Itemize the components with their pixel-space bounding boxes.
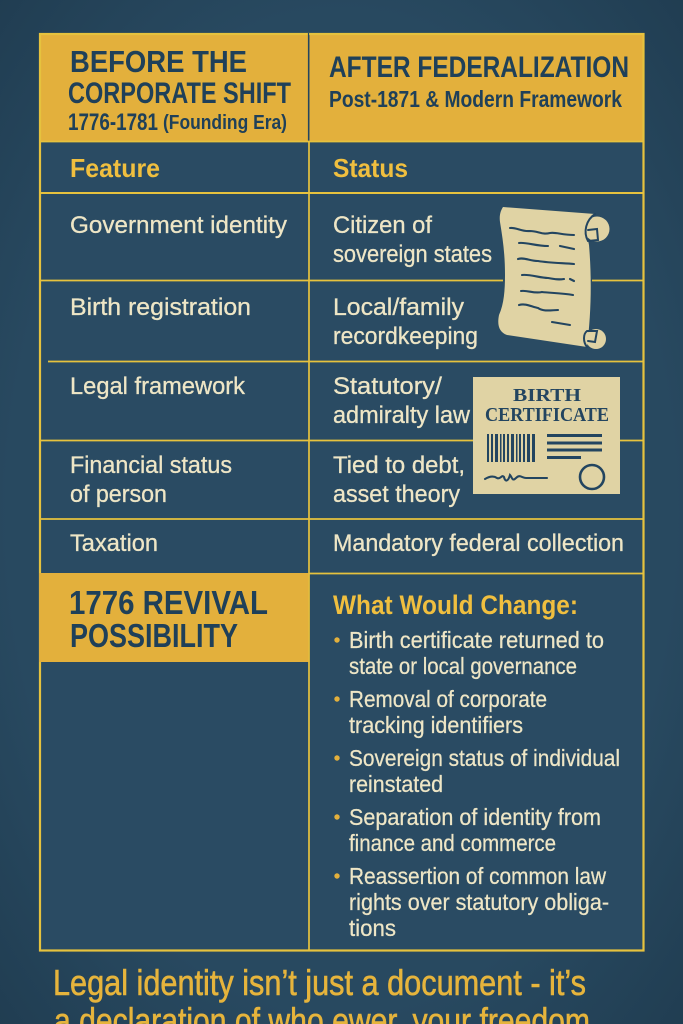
- bullet 4: finance and commerce: [349, 830, 556, 856]
- header panel: before: 1776-1781: [68, 109, 158, 136]
- row: birth registration: [70, 294, 478, 350]
- icon: parchment scroll: [498, 207, 610, 349]
- certificate text lines: [547, 434, 602, 459]
- header panel: before: (Founding Era): [163, 112, 287, 134]
- bullet 1: [334, 627, 604, 679]
- header panel: before: CORPORATE SHIFT: [68, 77, 291, 110]
- row: financial status: Tied to debt,: [333, 452, 465, 479]
- panel: 1776 revival possibility: 1776 REVIVAL: [69, 584, 268, 621]
- row: legal framework: Legal framework: [70, 373, 246, 400]
- row: financial status: asset theory: [333, 481, 461, 508]
- icon: birth certificate: CERTIFICATE: [485, 404, 609, 426]
- bullet 3: Sovereign status of individual: [349, 745, 620, 771]
- row: financial status: [70, 452, 465, 508]
- footer statement: [53, 962, 590, 1024]
- bullet 2: [334, 686, 547, 738]
- header panel: after: [310, 33, 644, 141]
- header panel: before: [39, 33, 308, 141]
- header panel: before: BEFORE THE: [70, 44, 247, 79]
- row: birth registration: Local/family: [333, 294, 465, 321]
- panel: 1776 revival possibility: POSSIBILITY: [70, 617, 238, 654]
- row: birth registration: Birth registration: [70, 294, 251, 321]
- row: government identity: Citizen of: [333, 212, 432, 239]
- column heading: status: Status: [333, 153, 408, 183]
- row: government identity: sovereign states: [333, 241, 492, 268]
- bullet 3: reinstated: [349, 771, 443, 797]
- bullet 2: Removal of corporate: [349, 686, 547, 712]
- row: legal framework: Statutory/: [333, 373, 442, 400]
- header panel: after: Post-1871 & Modern Framework: [329, 86, 623, 112]
- row: government identity: Government identity: [70, 212, 288, 239]
- row: taxation: Mandatory federal collection: [333, 530, 624, 557]
- barcode: [487, 434, 535, 462]
- seal: [580, 465, 604, 489]
- bullet 5: [334, 863, 609, 941]
- row: financial status: Financial status: [70, 452, 232, 479]
- row: government identity: [70, 212, 492, 268]
- bullet 3: [334, 745, 620, 797]
- icon: birth certificate: [473, 377, 620, 494]
- bullet 1: state or local governance: [349, 653, 577, 679]
- row: legal framework: admiralty law: [333, 402, 470, 429]
- signature: [485, 475, 547, 481]
- bullet 5: Reassertion of common law: [349, 863, 607, 889]
- bullet 4: Separation of identity from: [349, 804, 601, 830]
- bullet 5: tions: [349, 915, 396, 941]
- panel: 1776 revival possibility: [39, 573, 308, 662]
- row: legal framework: [70, 373, 470, 429]
- table grid lines: [40, 33, 644, 950]
- row: taxation: [70, 530, 624, 557]
- row: taxation: Taxation: [70, 530, 158, 557]
- bullet 5: rights over statutory obliga-: [349, 889, 609, 915]
- row: birth registration: recordkeeping: [333, 323, 478, 350]
- bullet 2: tracking identifiers: [349, 712, 523, 738]
- comparison table: [39, 33, 644, 951]
- bullet 1: Birth certificate returned to: [349, 627, 604, 653]
- table panel: [40, 34, 644, 951]
- bullet 4: [334, 804, 601, 856]
- footer statement: Legal identity isn’t just a document - it’s: [53, 962, 586, 1003]
- column heading: feature: Feature: [70, 153, 160, 183]
- panel: what would change: [333, 590, 620, 941]
- row: financial status: of person: [70, 481, 167, 508]
- subheading: What Would Change:: [333, 590, 578, 620]
- icon: birth certificate: BIRTH: [513, 385, 581, 405]
